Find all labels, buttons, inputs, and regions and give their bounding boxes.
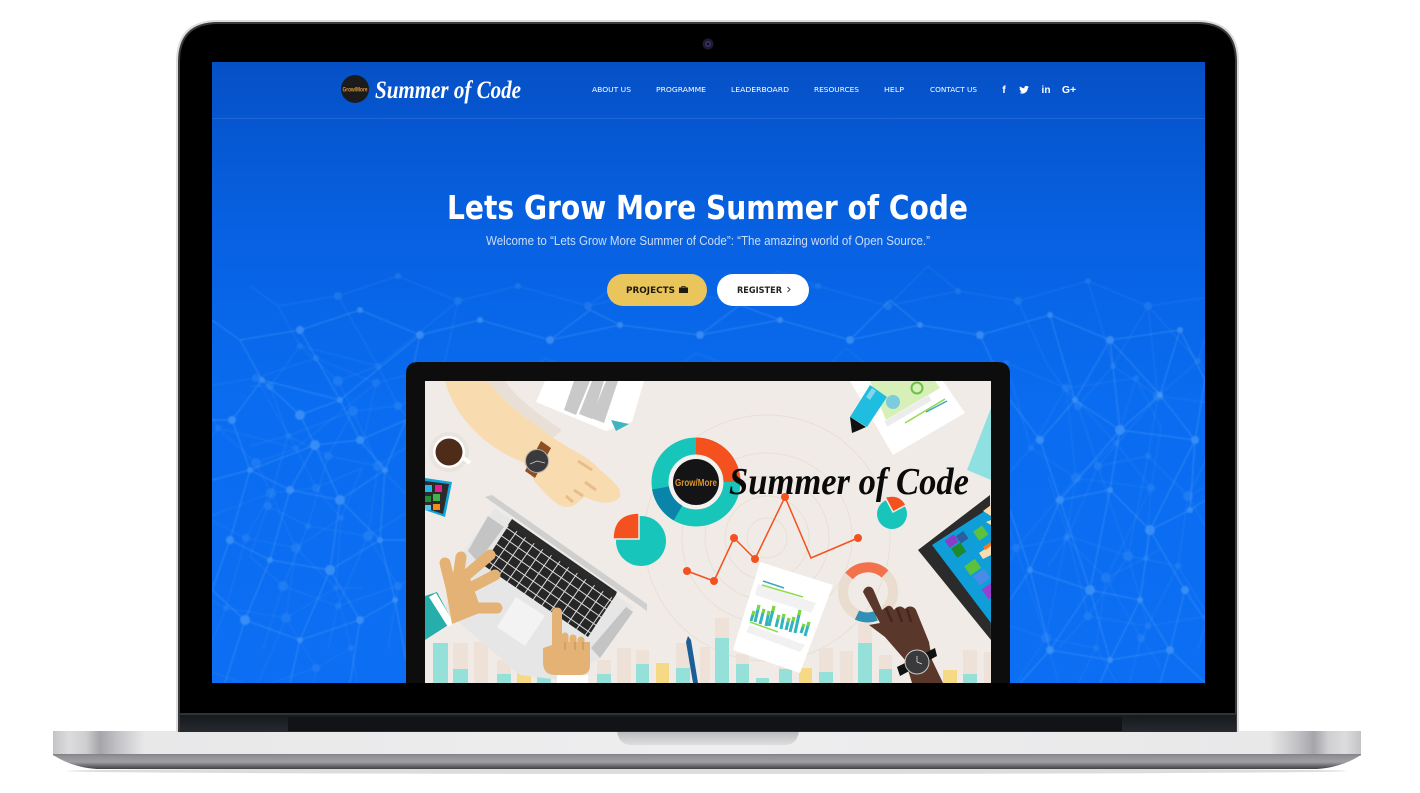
logo donut [660, 446, 732, 518]
trackpad notch [617, 731, 799, 745]
heading: summer of code: Summer of Code [729, 461, 969, 503]
navigation menu: HELP [884, 86, 904, 94]
small pie chart [877, 496, 907, 529]
button: register [717, 274, 809, 306]
bottom hand on keyboard [543, 608, 590, 683]
background bars [433, 618, 991, 683]
progress ring [843, 567, 893, 617]
navigation menu: RESOURCES [814, 86, 860, 94]
button: projects [607, 274, 707, 306]
marker pen [850, 385, 887, 433]
teal document [967, 408, 991, 480]
logo: Summer of Code [375, 77, 521, 104]
subtitle: Welcome to “Lets Grow More Summer of Code”: “The amazing world of Open Source.” [486, 234, 930, 248]
hinge center shade [288, 717, 1122, 731]
pen [686, 636, 698, 683]
nav divider [212, 118, 1205, 119]
navigation menu: LEADERBOARD [731, 86, 789, 94]
top-right document [850, 381, 965, 455]
small tablet [425, 478, 452, 517]
navigation menu: CONTACT US [930, 86, 978, 94]
title: Lets Grow More Summer of Code [447, 188, 968, 227]
button: projects: PROJECTS [626, 286, 675, 296]
logo: Grow/More [342, 86, 368, 94]
pointing hand with watch [445, 381, 620, 507]
pie chart [613, 513, 666, 566]
screen: website hero [212, 62, 1205, 683]
coffee cup [433, 436, 471, 468]
webcam [702, 38, 714, 50]
navigation menu: PROGRAMME [656, 86, 706, 94]
social icons: G+ [1062, 84, 1076, 96]
logo donut: Grow/More [675, 478, 717, 489]
social icons [1002, 86, 1076, 94]
center document with bar chart [733, 562, 833, 673]
laptop illustration [445, 495, 647, 680]
network background pattern [212, 266, 1205, 683]
navigation menu: ABOUT US [592, 86, 632, 94]
tablet with hand [918, 495, 998, 640]
concentric circles [644, 415, 890, 661]
top-left document [536, 381, 644, 431]
line chart [683, 493, 862, 585]
inner monitor frame [406, 362, 1010, 683]
laptop lid [176, 20, 1239, 732]
logo [341, 75, 521, 104]
dark hand with watch [863, 587, 943, 683]
social icons: f [1002, 84, 1006, 96]
button: register: REGISTER [737, 286, 782, 296]
left hand on keyboard [425, 555, 497, 640]
laptop base [53, 731, 1361, 774]
social icons: in [1042, 85, 1050, 96]
navigation menu [592, 87, 977, 92]
monitor illustration [425, 381, 998, 683]
